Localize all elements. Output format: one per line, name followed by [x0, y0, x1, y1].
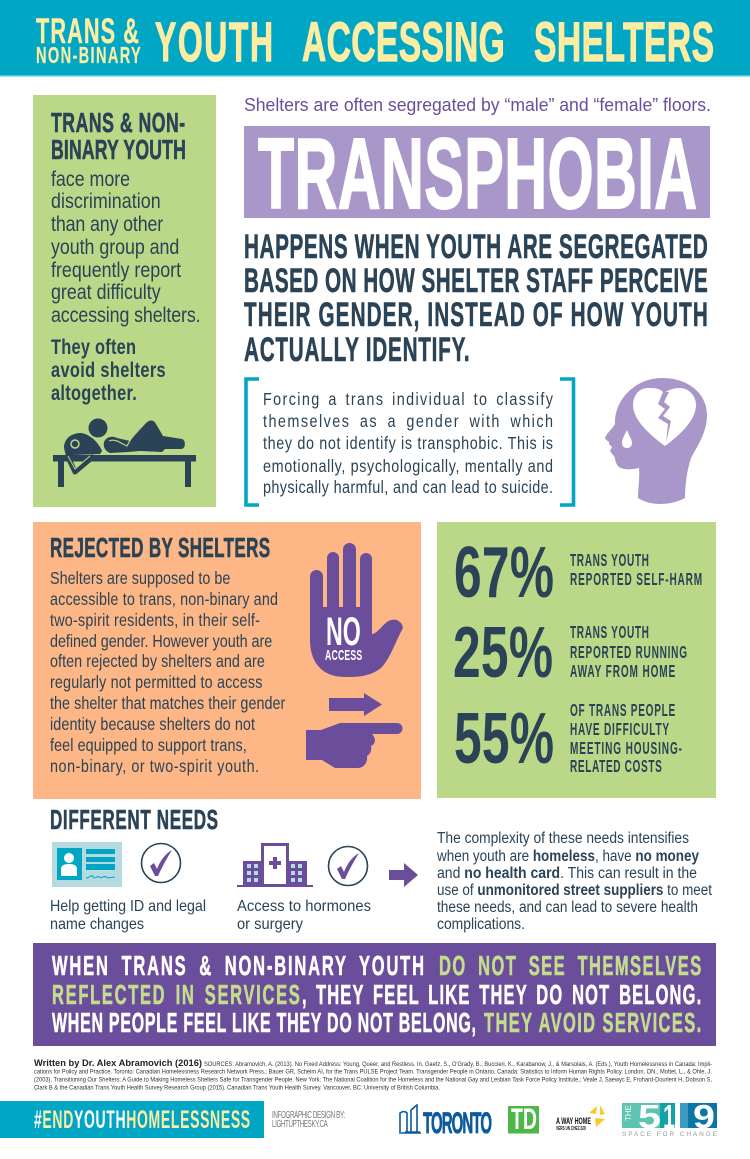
panel: rejected by shelters: the shelter that matches their gender — [50, 695, 286, 713]
credits and sources: Clark B & the Canadian Trans Youth Health Survey Research Group (2015). Canadian Trans Youth Health Survey. Vancouver, BC: University of British Columbia. — [34, 1084, 440, 1092]
callout: forcing a trans individual: Forcing a trans individual to classify — [263, 390, 554, 409]
text: access to hormones: or surgery — [237, 916, 303, 933]
panel: rejected by shelters: feel equipped to support trans, — [50, 737, 247, 755]
stat: 67 percent self-harm — [454, 533, 702, 613]
banner: do not see themselves reflected: THEY AVOID SERVICES. — [484, 1007, 701, 1038]
heading: different needs: DIFFERENT NEEDS — [50, 804, 218, 835]
design credit — [272, 1108, 345, 1129]
panel: rejected by shelters: non-binary, or two-spirit youth. — [50, 758, 259, 776]
panel: rejected by shelters: REJECTED BY SHELTERS — [50, 532, 270, 563]
panel: trans and non-binary youth: avoid shelters — [51, 358, 166, 381]
stat: 55 percent housing costs: MEETING HOUSING- — [570, 739, 682, 759]
panel: trans and non-binary youth: BINARY YOUTH — [51, 134, 186, 165]
panel: trans and non-binary youth: face more — [51, 168, 130, 191]
callout: forcing a trans individual: physically harmful, and can lead to suicide. — [263, 478, 553, 497]
panel: statistics — [437, 522, 716, 798]
heading: happens when youth are segregated: ACTUALLY IDENTIFY. — [244, 331, 470, 369]
subheading: segregated floors: Shelters are often segregated by “male” and “female” floors. — [244, 94, 711, 115]
header banner: SHELTERS — [534, 10, 714, 73]
icon: no access hand: ACCESS — [325, 647, 362, 664]
text: complexity of needs: when youth are homeless, have no money — [436, 848, 699, 865]
panel: trans and non-binary youth: frequently report — [51, 259, 182, 282]
panel: rejected by shelters — [33, 522, 421, 799]
icon: check mark one — [142, 844, 180, 882]
header banner: TRANS & — [36, 13, 139, 51]
banner: do not see themselves reflected: , — [302, 979, 307, 1010]
text: access to hormones — [237, 898, 371, 933]
icon: person lying on bench — [53, 418, 196, 487]
stat: 25 percent running away — [453, 613, 687, 693]
header banner: YOUTH — [155, 11, 273, 73]
text: complexity of needs: and no health card. This can result in the — [437, 865, 697, 882]
icon: arrow right — [329, 693, 382, 716]
text: complexity of needs — [436, 830, 713, 933]
panel: rejected by shelters: Shelters are supposed to be — [50, 570, 230, 588]
icon: check mark two — [328, 846, 368, 886]
logo: toronto: TORONTO — [423, 1108, 492, 1141]
icon: no access hand: NO — [326, 608, 361, 654]
logo: toronto — [399, 1105, 492, 1141]
logo: the 519: 1 — [663, 1098, 675, 1135]
panel: rejected by shelters: often rejected by shelters and are — [50, 653, 265, 671]
text: access to hormones: Access to hormones — [237, 898, 371, 915]
banner: do not see themselves reflected: THEY FEEL LIKE THEY DO NOT BELONG. — [316, 979, 701, 1010]
stat: 25 percent running away: REPORTED RUNNING — [570, 643, 687, 663]
logo: td — [508, 1103, 539, 1136]
panel: rejected by shelters: two-spirit residents, in their self- — [50, 612, 260, 630]
heading: happens when youth are segregated — [244, 228, 708, 369]
stat: 25 percent running away: AWAY FROM HOME — [570, 662, 675, 682]
stat: 55 percent housing costs: HAVE DIFFICULTY — [570, 720, 669, 740]
credits and sources — [34, 1058, 712, 1092]
panel: rejected by shelters: defined gender. However youth are — [50, 633, 272, 651]
logo: a way home: VERS UN CHEZ-SOI — [556, 1126, 586, 1132]
logo: the 519 — [622, 1098, 718, 1138]
callout: forcing a trans individual — [246, 379, 574, 505]
heading: happens when youth are segregated: THEIR GENDER, INSTEAD OF HOW YOUTH — [244, 296, 708, 334]
icon: head with broken heart — [605, 378, 707, 504]
icon: hospital — [237, 844, 313, 887]
credits and sources: Written by Dr. Alex Abramovich (2016) — [34, 1058, 202, 1069]
logo: a way home: A WAY HOME — [556, 1116, 591, 1126]
panel: trans and non-binary youth: TRANS & NON- — [51, 107, 185, 138]
callout: forcing a trans individual: themselves as a gender with which — [263, 412, 553, 431]
header banner: NON-BINARY — [36, 43, 141, 69]
panel: trans and non-binary youth: great difficulty — [51, 281, 161, 304]
panel: trans and non-binary youth: discrimination — [51, 190, 161, 213]
callout: forcing a trans individual: they do not identify is transphobic. This is — [263, 434, 553, 453]
banner: do not see themselves reflected: WHEN PEOPLE FEEL LIKE THEY DO NOT BELONG, — [52, 1008, 476, 1038]
text: help getting id — [50, 898, 206, 933]
panel: rejected by shelters: regularly not permitted to access — [50, 674, 262, 692]
design credit: LIGHTUPTHESKY.CA — [272, 1117, 328, 1129]
text: help getting id: Help getting ID and legal — [50, 898, 206, 915]
header banner — [0, 0, 750, 76]
stat: 67 percent self-harm: TRANS YOUTH — [570, 551, 649, 571]
panel: rejected by shelters: accessible to trans, non-binary and — [50, 591, 278, 609]
logo: the 519: 5 — [638, 1098, 661, 1135]
text: help getting id: name changes — [50, 916, 144, 933]
banner: do not see themselves reflected: WHEN TRANS & NON-BINARY YOUTH — [52, 950, 424, 981]
stat: 55 percent housing costs: OF TRANS PEOPLE — [570, 701, 675, 721]
icon: id card — [52, 842, 122, 887]
design credit: INFOGRAPHIC DESIGN BY: — [272, 1108, 345, 1120]
stat: 25 percent running away: 25% — [453, 613, 553, 693]
header banner: ACCESSING — [302, 10, 505, 73]
stat: 67 percent self-harm: REPORTED SELF-HARM — [570, 570, 702, 590]
stat: 55 percent housing costs — [454, 699, 682, 779]
panel: trans and non-binary youth — [33, 95, 216, 507]
banner: do not see themselves reflected — [33, 943, 716, 1046]
panel: rejected by shelters: identity because shelters do not — [50, 716, 255, 734]
logo: td: TD — [511, 1103, 537, 1136]
stat: 55 percent housing costs: RELATED COSTS — [570, 757, 662, 777]
logo: the 519: 9 — [693, 1098, 715, 1135]
hashtag bar: #ENDYOUTHHOMELESSNESS — [34, 1107, 250, 1134]
panel: trans and non-binary youth: youth group and — [51, 236, 179, 259]
text: complexity of needs: these needs, and can lead to severe health — [437, 899, 698, 916]
text: complexity of needs: complications. — [437, 916, 525, 933]
panel: trans and non-binary youth: than any other — [51, 213, 164, 236]
banner: do not see themselves reflected: DO NOT SEE THEMSELVES — [439, 950, 701, 981]
panel: trans and non-binary youth: accessing shelters. — [51, 304, 201, 327]
logo: a way home — [556, 1105, 605, 1132]
icon: no access hand — [310, 543, 403, 677]
callout: forcing a trans individual: emotionally, psychologically, mentally and — [263, 457, 553, 476]
logo: the 519: SPACE FOR CHANGE — [622, 1131, 718, 1138]
stat: 25 percent running away: TRANS YOUTH — [570, 623, 649, 643]
text: complexity of needs: use of unmonitored street suppliers to meet — [437, 882, 713, 899]
text: complexity of needs: The complexity of these needs intensifies — [437, 830, 689, 847]
heading: happens when youth are segregated: BASED ON HOW SHELTER STAFF PERCEIVE — [244, 262, 708, 300]
icon: pointing hand — [306, 723, 403, 768]
arrow: needs to complexity — [389, 863, 418, 887]
stat: 67 percent self-harm: 67% — [454, 533, 554, 613]
panel: trans and non-binary youth: They often — [51, 335, 136, 358]
headline: transphobia: TRANSPHOBIA — [258, 119, 697, 230]
stat: 55 percent housing costs: 55% — [454, 699, 554, 779]
banner: do not see themselves reflected: REFLECTED IN SERVICES — [52, 979, 300, 1010]
heading: happens when youth are segregated: HAPPENS WHEN YOUTH ARE SEGREGATED — [244, 228, 708, 266]
hashtag bar — [0, 1101, 264, 1138]
panel: trans and non-binary youth: altogether. — [51, 381, 137, 404]
logo: the 519: THE — [624, 1105, 633, 1121]
